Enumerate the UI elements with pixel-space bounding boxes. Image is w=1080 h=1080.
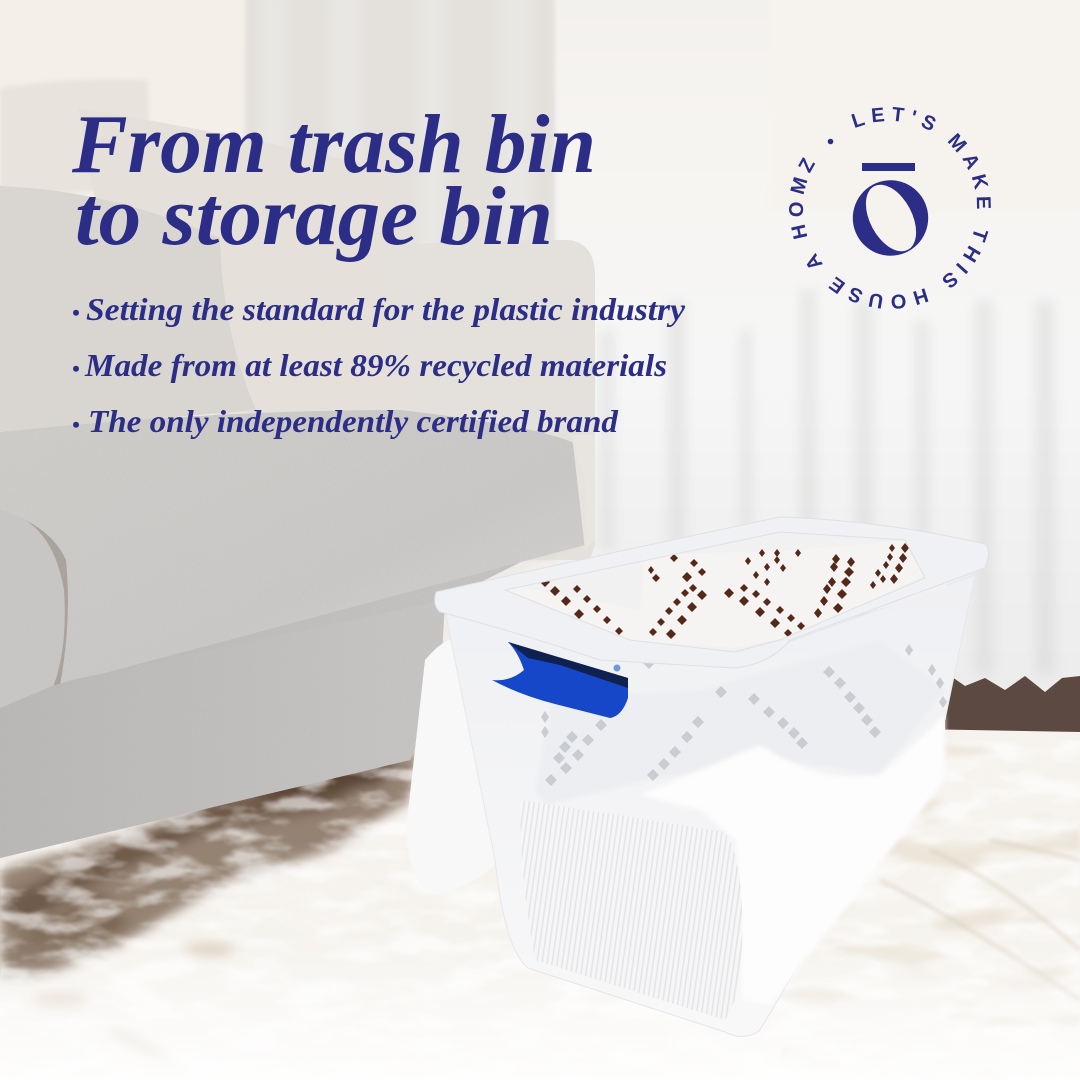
left seat front (0, 510, 65, 712)
sofa (0, 79, 595, 858)
sofa base front (0, 600, 445, 858)
arm front (572, 435, 595, 550)
logo macron (862, 163, 915, 171)
ghost diamonds (541, 644, 947, 786)
sofa base (0, 530, 585, 858)
rear pillow (78, 108, 410, 415)
sofa fabric grain (0, 410, 586, 858)
fluffy towel (640, 715, 945, 1005)
clip pin (614, 664, 620, 672)
rug dark shag (0, 750, 420, 978)
rug fluff (0, 740, 1080, 1080)
rug (0, 720, 1080, 1080)
ribbed towel front (520, 800, 742, 1020)
heading: From trash bin (71, 98, 596, 191)
ghost pillow (535, 640, 945, 805)
logo ring opening (856, 176, 926, 260)
right curtain (555, 0, 1080, 692)
seat shadow (0, 500, 72, 720)
heading: to storage bin (75, 170, 553, 263)
bullet list: Made from at least 89% recycled materials (84, 347, 667, 383)
front pillow (0, 186, 256, 432)
bullet list: • (72, 412, 80, 437)
bullet list: • (72, 300, 80, 325)
leaning lid panel (406, 638, 500, 893)
box lid interior (470, 520, 965, 655)
bullet list: • (72, 356, 80, 381)
box body (445, 575, 975, 1037)
handle clip (492, 642, 628, 718)
floor strip (945, 672, 1080, 740)
sofa back cushion (0, 79, 150, 195)
logo ring (853, 180, 928, 256)
seat cushion (0, 410, 586, 685)
bullet list (72, 291, 686, 439)
sofa arm (378, 240, 595, 560)
bullet list: Setting the standard for the plastic industry (86, 291, 686, 327)
pillow inside box (508, 540, 925, 648)
logo badge (789, 106, 991, 309)
storage box (406, 517, 988, 1037)
bullet list: The only independently certified brand (88, 403, 619, 439)
circular slogan: LET'S MAKE THIS HOUSE A HOMZ (789, 106, 991, 309)
slogan dot (828, 139, 833, 144)
rug veins (780, 730, 1080, 1080)
translucent lid rim (435, 517, 989, 668)
dark diamond pattern (515, 543, 909, 639)
heading (71, 98, 596, 263)
